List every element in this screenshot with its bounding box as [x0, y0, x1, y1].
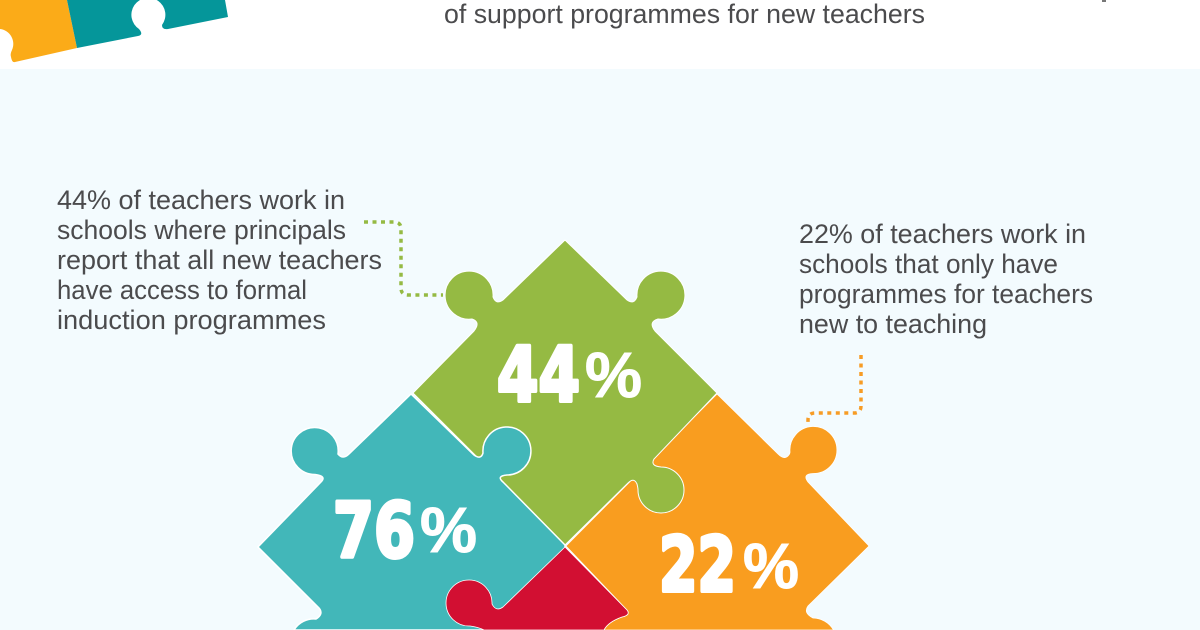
label: 44%: 44 [497, 330, 580, 419]
arrow: orange dotted connector [808, 355, 861, 426]
callout: 22% text: 22% of teachers work in [799, 219, 1086, 249]
icon: top puzzle pieces [0, 0, 228, 62]
puzzle piece: teal [258, 394, 565, 630]
arrow: green dotted connector [364, 222, 443, 295]
label: 22%: % [743, 530, 799, 602]
callout: 22% text: programmes for teachers [799, 279, 1093, 309]
callout: 44% text: induction programmes [57, 305, 326, 335]
puzzle piece: red [446, 547, 628, 630]
label: 22%: 22 [659, 520, 736, 609]
text fragment top right [1102, 0, 1106, 2]
label: 76%: % [420, 494, 477, 566]
callout: 44% text: report that all new teachers [57, 245, 382, 275]
callout: 22% text: new to teaching [799, 309, 987, 339]
puzzle piece: orange [566, 394, 869, 630]
callout: 44% text: have access to formal [57, 275, 307, 305]
puzzle piece: green [413, 240, 717, 545]
callout: 44% text: 44% of teachers work in [57, 185, 345, 215]
label: 44%: % [585, 339, 642, 411]
callout: 44% text: schools where principals [57, 215, 346, 245]
callout: 44% text [57, 185, 382, 335]
callout: 22% text [799, 219, 1093, 339]
label: 76%: 76 [333, 486, 415, 575]
callout: 22% text: schools that only have [799, 249, 1058, 279]
